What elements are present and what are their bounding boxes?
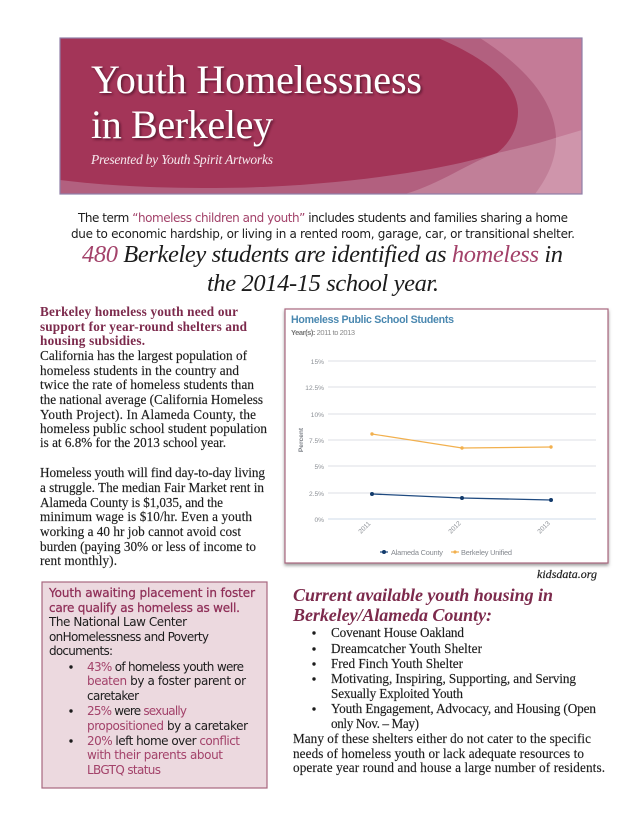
callout statistics list: 20% left home over conflict <box>87 734 240 748</box>
left column paragraph: day-to-day struggle: burden (paying 30% or less of income to <box>40 539 256 554</box>
callout intro: onHomelessness and Poverty <box>49 630 209 644</box>
banner title: Youth Homelessness <box>91 57 422 102</box>
y axis labels: 0% <box>314 517 324 524</box>
definition text: The term “homeless children and youth” includes students and families sharing a home <box>77 211 568 225</box>
callout statistics list: with their parents about <box>87 748 223 762</box>
callout intro <box>48 615 209 658</box>
headline statistic: 480 Berkeley students are identified as homeless in <box>82 241 563 268</box>
left column paragraph: day-to-day struggle: minimum wage is $10/hr. Even a youth <box>40 509 252 524</box>
left column paragraph: California: homeless students in the country and <box>40 363 239 378</box>
housing list: Covenant House Oakland <box>331 625 464 640</box>
housing heading: Current available youth housing in <box>293 585 553 605</box>
series: Alameda County <box>370 492 553 502</box>
left column paragraph: California: twice the rate of homeless students than <box>40 377 254 392</box>
chart legend <box>380 548 512 557</box>
housing closing paragraph: needs of homeless youth or lack adequate resources to <box>293 746 584 761</box>
left column heading: Berkeley homeless youth need our <box>40 304 238 319</box>
y axis labels: 5% <box>314 464 324 471</box>
chart legend: Berkeley Unified <box>461 548 512 557</box>
callout intro: The National Law Center <box>48 615 187 629</box>
headline statistic <box>82 241 563 297</box>
x axis labels: 2011 <box>357 520 373 535</box>
headline statistic: the 2014-15 school year. <box>207 270 439 297</box>
y axis title: Percent <box>298 427 305 452</box>
left column paragraph: California: is at 6.8% for the 2013 school year. <box>40 435 226 450</box>
chart title: Homeless Public School Students <box>291 314 454 326</box>
housing list: Fred Finch Youth Shelter <box>331 656 464 671</box>
x axis labels: 2012 <box>447 520 463 535</box>
y axis labels: 15% <box>311 359 324 366</box>
left column paragraph: day-to-day struggle: Homeless youth will find day-to-day living <box>40 465 265 480</box>
left column paragraph: day-to-day struggle: Alameda County is $1,035, and the <box>40 495 223 510</box>
left column paragraph: California: homeless public school student population <box>40 421 267 436</box>
housing closing paragraph: operate year round and house a large number of residents. <box>293 760 605 775</box>
y axis labels: 12.5% <box>305 385 324 392</box>
definition text <box>71 211 575 241</box>
callout statistics list: 25% were sexually <box>87 704 187 718</box>
y axis labels <box>305 359 324 524</box>
housing heading <box>292 585 553 625</box>
banner title: in Berkeley <box>91 102 273 147</box>
x axis labels: 2013 <box>536 520 552 535</box>
left column paragraph: California: Youth Project). In Alameda County, the <box>40 407 256 422</box>
left column paragraph: day-to-day struggle: working a 40 hr job cannot avoid cost <box>40 524 241 539</box>
callout statistics list <box>69 660 248 777</box>
left column paragraph: day-to-day struggle: rent monthly). <box>40 553 117 568</box>
callout statistics list: caretaker <box>87 689 139 703</box>
callout heading: care qualify as homeless as well. <box>49 601 240 615</box>
callout statistics list: LBGTQ status <box>87 763 161 777</box>
banner subtitle: Presented by Youth Spirit Artworks <box>90 152 273 167</box>
callout intro: documents: <box>49 644 113 658</box>
panel: foster care callout <box>42 582 267 788</box>
left column paragraph: California: California has the largest population of <box>40 348 248 363</box>
housing list <box>312 625 596 731</box>
panel: line chart <box>285 309 608 563</box>
housing list: Youth Engagement, Advocacy, and Housing (Open <box>331 701 596 716</box>
left column paragraph: California: the national average (California Homeless <box>40 392 263 407</box>
callout statistics list: 43% of homeless youth were <box>87 660 244 674</box>
housing list: only Nov. – May) <box>331 716 419 731</box>
callout heading: Youth awaiting placement in foster <box>48 586 255 600</box>
banner <box>60 38 582 194</box>
y axis labels: 10% <box>311 412 324 419</box>
chart legend: Alameda County <box>391 548 443 557</box>
housing closing paragraph: Many of these shelters either do not cater to the specific <box>293 731 591 746</box>
definition text: due to economic hardship, or living in a rented room, garage, car, or transitional shelter. <box>71 227 575 241</box>
left column paragraph: day-to-day struggle: a struggle. The median Fair Market rent in <box>40 480 264 495</box>
housing list: Motivating, Inspiring, Supporting, and Serving <box>331 671 576 686</box>
left column paragraph: day-to-day struggle <box>40 465 265 568</box>
housing closing paragraph <box>293 731 605 775</box>
series: Berkeley Unified <box>370 432 553 450</box>
left column paragraph: California <box>40 348 267 450</box>
housing list: Dreamcatcher Youth Shelter <box>331 641 483 656</box>
banner background shapes <box>60 38 582 194</box>
chart gridlines <box>328 361 596 519</box>
left column heading: housing subsidies. <box>40 333 145 348</box>
housing list: Sexually Exploited Youth <box>331 686 463 701</box>
callout statistics list: beaten by a foster parent or <box>87 674 246 688</box>
banner title <box>91 57 422 147</box>
housing heading: Berkeley/Alameda County: <box>292 605 492 625</box>
chart source credit: kidsdata.org <box>537 567 597 581</box>
y axis labels: 7.5% <box>309 438 324 445</box>
chart subtitle: Year(s): 2011 to 2013 <box>291 328 355 337</box>
callout heading <box>48 586 255 615</box>
x axis labels <box>357 520 552 535</box>
left column heading <box>40 304 248 348</box>
callout statistics list: propositioned by a caretaker <box>87 719 248 733</box>
y axis labels: 2.5% <box>309 491 324 498</box>
left column heading: support for year-round shelters and <box>40 319 248 334</box>
